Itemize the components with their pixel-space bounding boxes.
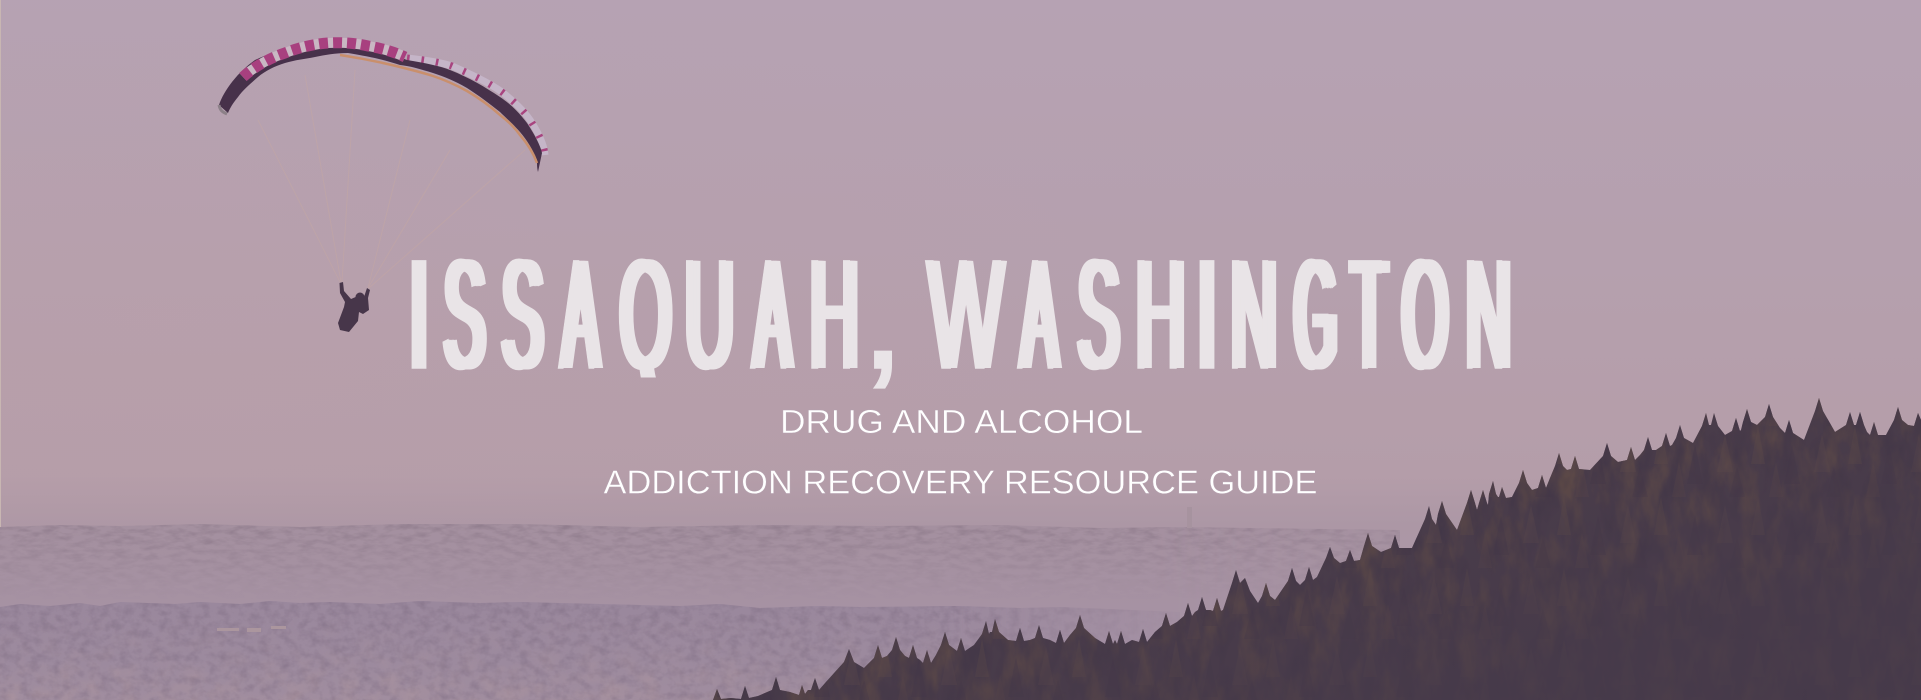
title: G: [1290, 227, 1332, 401]
title: N: [1227, 227, 1273, 401]
title: Q: [616, 227, 668, 401]
title: A: [558, 227, 594, 401]
title: I: [399, 227, 439, 401]
title: T: [1347, 227, 1383, 401]
pilot silhouette: [338, 282, 370, 332]
subtitle line 1: DRUG AND ALCOHOL: [780, 403, 1143, 440]
title: A: [1017, 227, 1053, 401]
title: H: [1132, 227, 1182, 401]
paraglider lines: [258, 70, 525, 288]
paraglider: [219, 40, 545, 332]
title: S: [1074, 227, 1115, 401]
title: H: [806, 227, 855, 401]
title: U: [681, 227, 731, 401]
forested hillside: [700, 395, 1921, 700]
canopy: [219, 40, 545, 172]
title: W: [925, 227, 1001, 401]
title: [412, 258, 1510, 389]
title: ,: [859, 227, 907, 401]
title: A: [750, 227, 786, 401]
near valley hills: [0, 598, 1180, 700]
title: O: [1398, 227, 1444, 401]
far valley ridge: [0, 507, 1400, 607]
subtitle line 2: ADDICTION RECOVERY RESOURCE GUIDE: [604, 464, 1318, 500]
title: I: [1187, 227, 1227, 401]
title: N: [1462, 227, 1507, 401]
title: S: [498, 227, 539, 401]
title: S: [440, 227, 481, 401]
